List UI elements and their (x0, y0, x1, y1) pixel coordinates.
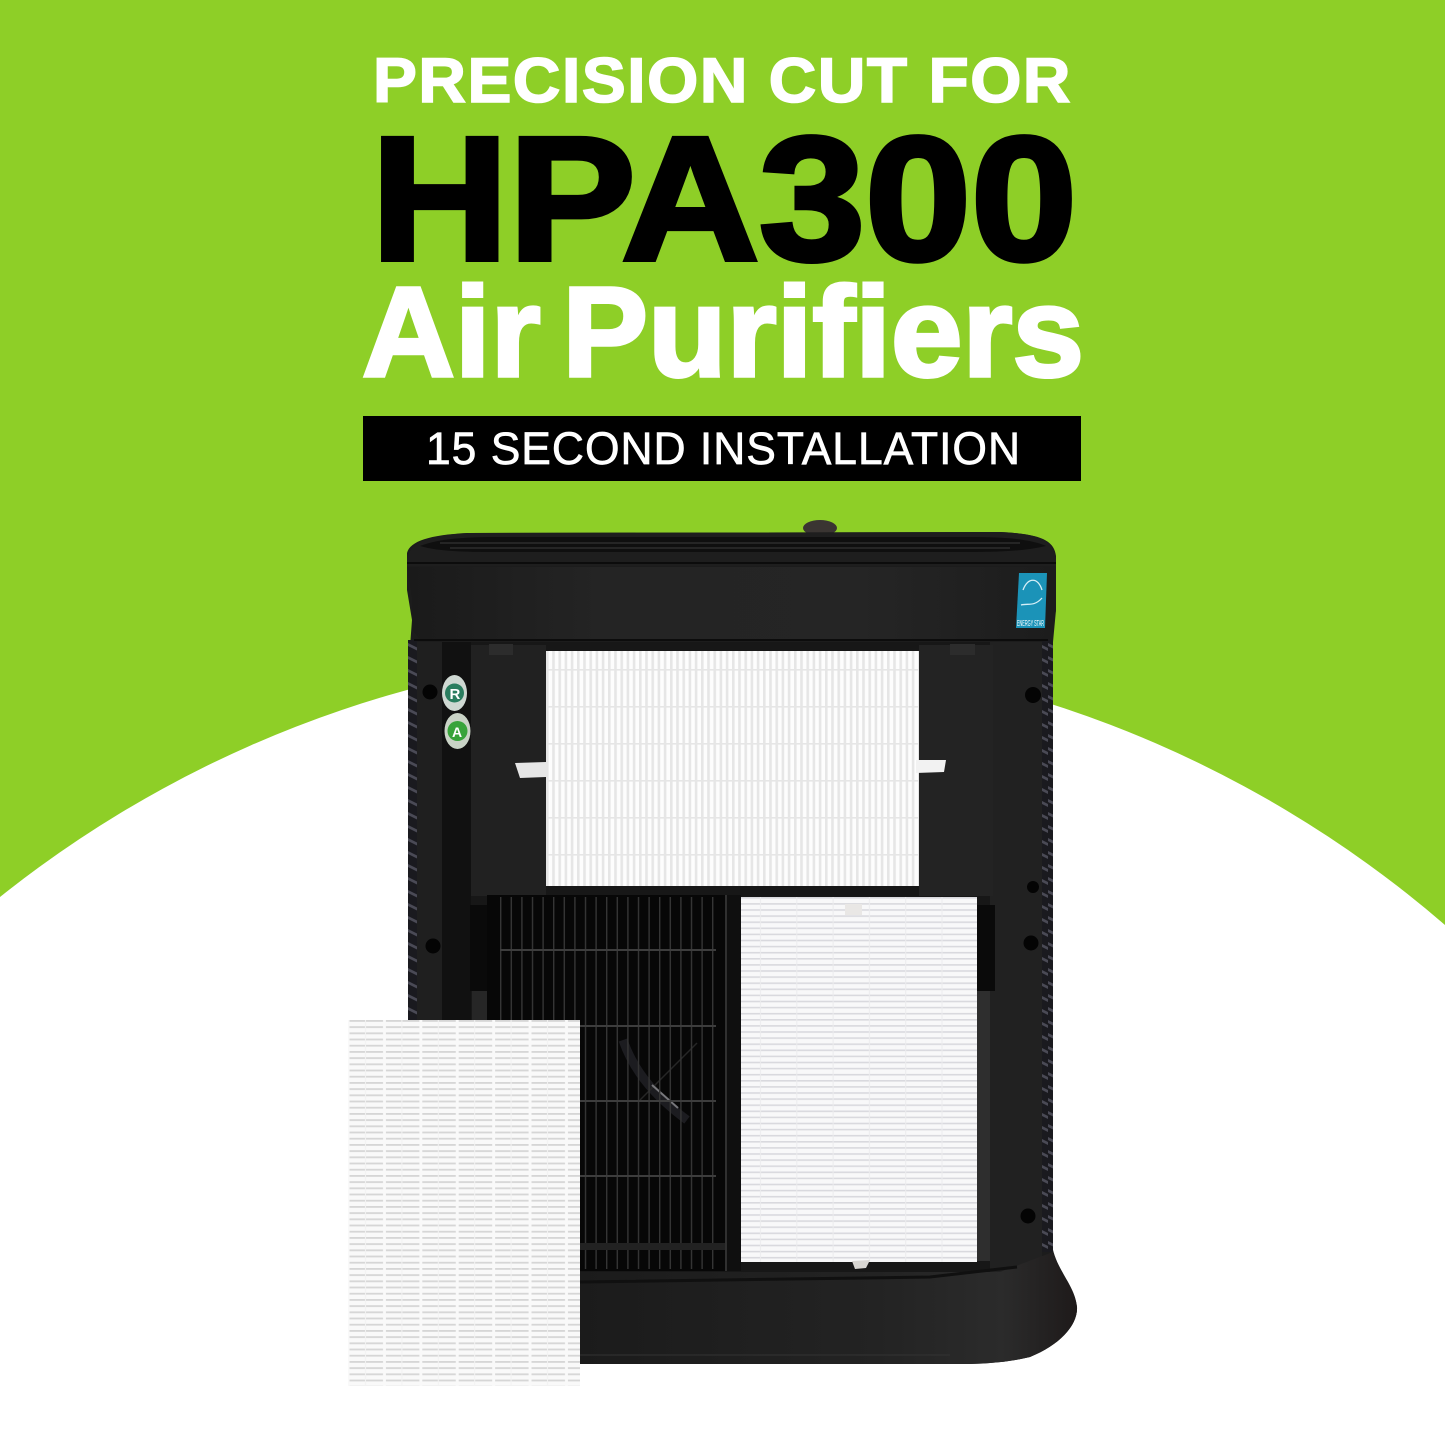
top band (407, 567, 1056, 640)
fan grille (487, 895, 725, 1271)
velcro strip left (470, 905, 487, 1271)
recycling sticker: R (450, 686, 460, 703)
screw holes (422, 684, 1041, 1224)
filter tab top (845, 904, 862, 915)
allergy sticker (444, 713, 470, 749)
pull tab left (515, 762, 546, 778)
pull tab right (916, 760, 946, 773)
loose replacement filter (348, 1020, 580, 1386)
heading: air purifiers: Air Purifiers (362, 261, 1084, 404)
side vent right (1042, 640, 1053, 1252)
side vent left (408, 640, 417, 1025)
recycling sticker (442, 675, 467, 711)
centre divider bar (725, 895, 741, 1271)
right door panel (919, 645, 993, 896)
energy star label (1016, 573, 1047, 628)
rear inner panel (417, 642, 1042, 1282)
heading: precision cut for: PRECISION CUT FOR (373, 46, 1072, 116)
purifier body (407, 532, 1077, 1364)
purifier knob (803, 520, 837, 536)
upper filter (515, 651, 946, 886)
air purifier (407, 520, 1077, 1364)
banner: 15 second installation: 15 SECOND INSTALLATION (426, 423, 1021, 474)
heading: HPA300: HPA300 (371, 102, 1077, 298)
velcro strip right (977, 905, 995, 1261)
allergy sticker: A (452, 724, 462, 740)
white arc background (0, 650, 1445, 1445)
air purifier: ENERGY STAR (1017, 618, 1044, 628)
filter tab bottom (852, 1260, 870, 1269)
left door panel (471, 645, 546, 896)
top rim (407, 532, 1056, 566)
clip tabs (489, 644, 975, 655)
lower installed filter (741, 897, 977, 1269)
banner: 15 second installation (363, 416, 1081, 481)
purifier base (580, 1252, 1077, 1364)
